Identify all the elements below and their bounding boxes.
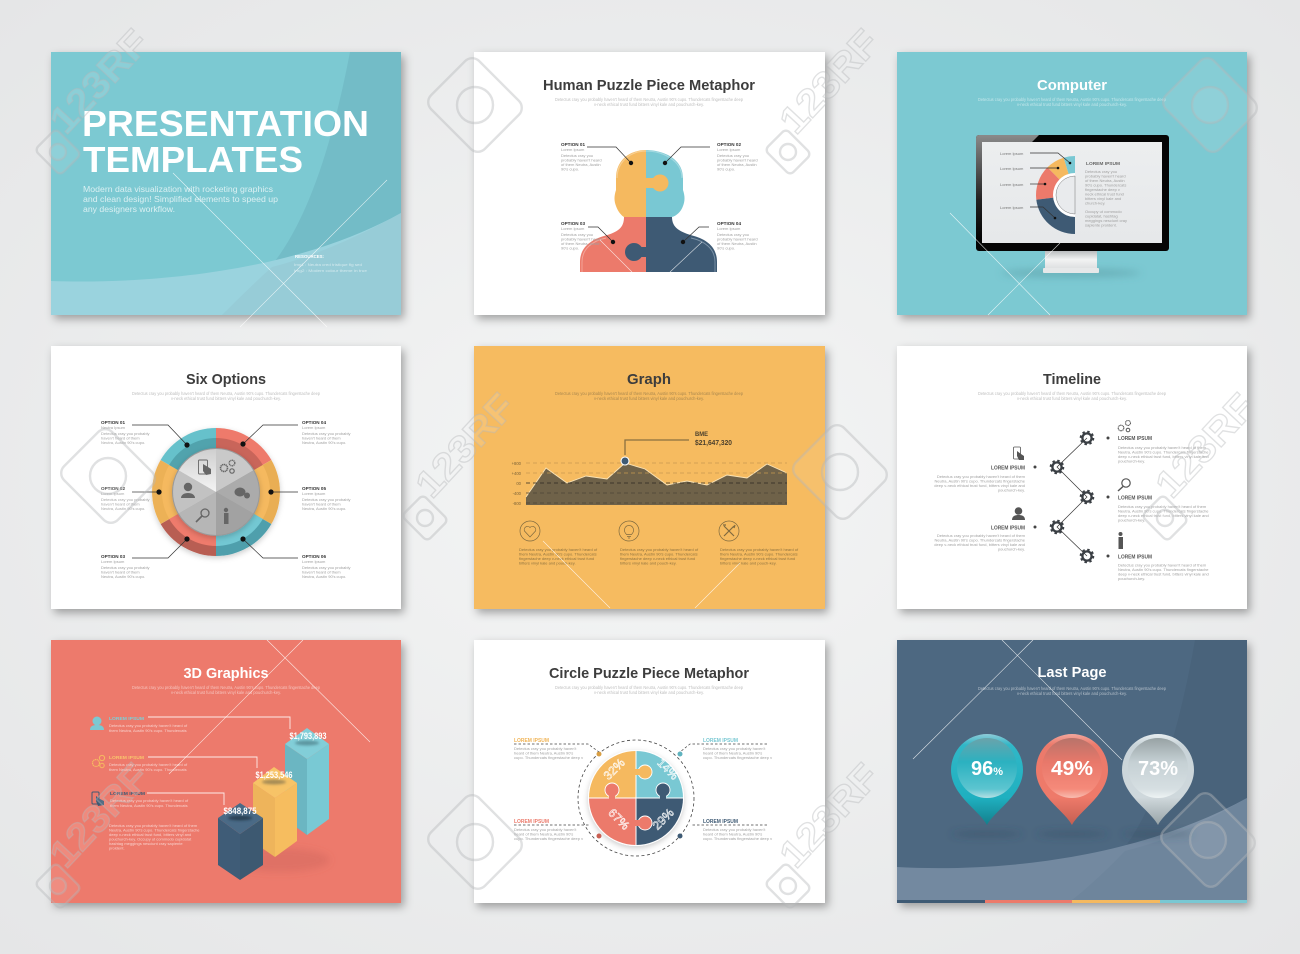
- puzzle labels: LOREM IPSUM: [703, 738, 738, 744]
- resources list: RESOURCES:: [295, 254, 325, 259]
- title: [82, 103, 369, 180]
- option 04 callout: [681, 221, 758, 250]
- option 02 callout: probably haven't heard: [717, 158, 758, 162]
- option labels: right: Detectus cray you probably: [302, 565, 350, 570]
- pin: 49 percent: 49%: [1051, 758, 1093, 780]
- option labels: right: Lorem Ipsum: [302, 559, 326, 564]
- computer body text: 90's cupo. Thundercats: [1085, 182, 1126, 188]
- timeline labels: right: deep v-neck ethical trust fund, bitters vinyl kale and: [1118, 572, 1209, 576]
- computer body text: probably haven't heard: [1085, 174, 1126, 178]
- option 03 callout: [561, 221, 615, 250]
- watermark diagonal lines: [169, 173, 1122, 774]
- option labels: left: Lorem Ipsum: [101, 491, 125, 496]
- option labels: left: haven't heard of them: [101, 502, 140, 506]
- subheading: v-neck ethical trust fund bitters vinyl kale and pouchurch-key.: [594, 690, 704, 695]
- icons: six options: [181, 460, 250, 524]
- option 03 callout: OPTION 03: [561, 221, 585, 226]
- subheading: v-neck ethical trust fund bitters vinyl kale and pouchurch-key.: [171, 690, 281, 695]
- option labels: left: [101, 420, 190, 579]
- option 02 callout: Detectus cray you: [717, 153, 749, 158]
- graph column text: them Neutra, Austin 90's cupo. Thundercats: [720, 552, 798, 556]
- axis labels: +800: [512, 461, 522, 466]
- subheading: Detectus cray you probably haven't heard of them Neutra, Austin 90's cupo. Thundercats fingerstache deep: [978, 391, 1167, 396]
- timeline labels: left: Neutra, Austin 90's cupo. Thundercats fingerstache: [934, 478, 1026, 484]
- computer body text: fingerstache deep v: [1085, 187, 1120, 192]
- computer body text: of them Neutra, Austin: [1085, 178, 1125, 183]
- option labels: left: haven't heard of them: [101, 436, 140, 440]
- computer body text: LOREM IPSUM: [1086, 161, 1120, 167]
- panel: last page: [897, 640, 1247, 903]
- timeline labels: left: pouchurch-key.: [998, 488, 1025, 492]
- option labels: right: Neutra, Austin 90's cupo.: [302, 506, 346, 511]
- 3d text blocks: LOREM IPSUM: [109, 716, 144, 722]
- subheading: Detectus cray you probably haven't heard of them Neutra, Austin 90's cupo. Thundercats fingerstache deep: [978, 97, 1167, 102]
- graph column text: fingerstache deep v-neck ethical trust fund: [720, 556, 795, 561]
- heading: Circle Puzzle Piece Metaphor: [549, 665, 749, 682]
- title: PRESENTATION: [82, 103, 369, 144]
- icon: gears: [92, 755, 105, 768]
- icon: crossed tools: [719, 521, 739, 541]
- option labels: right: Detectus cray you probably: [302, 431, 350, 436]
- teal bar: [285, 728, 329, 835]
- value labels: $1,253,546: [256, 770, 292, 780]
- peak callout: BME: [695, 432, 708, 438]
- option 01 callout: probably haven't heard: [561, 158, 602, 162]
- watermark overlay: 123RF: [772, 22, 888, 142]
- option labels: left: Detectus cray you probably: [101, 431, 149, 436]
- option labels: right: [240, 420, 350, 579]
- timeline labels: right: Neutra, Austin 90's cupo. Thundercats fingerstache: [1118, 567, 1209, 572]
- 3d text blocks: LOREM IPSUM: [109, 755, 144, 761]
- panel: computer: [897, 52, 1247, 315]
- heading: Last Page: [1038, 664, 1106, 681]
- pin: 96 percent: [951, 734, 1023, 825]
- computer body text: bitters vinyl kale and: [1085, 196, 1121, 201]
- timeline labels: left: LOREM IPSUM: [991, 526, 1025, 532]
- timeline labels: right: Detectus cray you probably haven't heard of them: [1118, 504, 1207, 509]
- axis labels: 00: [516, 481, 522, 486]
- 3d text blocks: LOREM IPSUM: [110, 791, 145, 797]
- icon: phone touch: [92, 792, 104, 806]
- watermark overlay: 123RF: [1148, 386, 1264, 506]
- 3d text blocks: deep v-neck ethical trust fund, bitters vinyl and: [109, 832, 191, 837]
- puzzle dashed leaders: [514, 744, 767, 825]
- puzzle labels: heard of them Neutra, Austin 90's: [514, 832, 573, 836]
- chart: person puzzle: [580, 150, 717, 272]
- graph column text: bitters vinyl kale and pouch-key.: [519, 560, 576, 566]
- computer leader labels: Lorem Ipsum: [1000, 205, 1024, 210]
- puzzle labels: heard of them Neutra, Austin 90's: [703, 832, 762, 836]
- option 03 callout: 90's cupo.: [561, 246, 579, 250]
- intro text: any designers workflow.: [83, 204, 175, 214]
- option 04 callout: Detectus cray you: [717, 232, 749, 237]
- subheading: Detectus cray you probably haven't heard of them Neutra, Austin 90's cupo. Thundercats fingerstache deep: [555, 97, 744, 102]
- option labels: right: Lorem Ipsum: [302, 491, 326, 496]
- option labels: right: Neutra, Austin 90's cupo.: [302, 440, 346, 445]
- timeline labels: right: Detectus cray you probably haven't heard of them: [1118, 445, 1207, 450]
- timeline labels: left: Neutra, Austin 90's cupo. Thundercats fingerstache: [934, 538, 1026, 542]
- puzzle labels: heard of them Neutra, Austin 90's: [514, 750, 573, 756]
- timeline labels: right: LOREM IPSUM: [1118, 436, 1152, 442]
- timeline labels: right: pouchurch-key.: [1118, 458, 1145, 464]
- title: TEMPLATES: [83, 139, 303, 180]
- peak callout: [621, 432, 732, 465]
- puzzle labels: cupo. Thundercats fingerstache deep v: [703, 755, 772, 760]
- panel: six options: [51, 346, 401, 609]
- pin: 73 percent: [1122, 734, 1194, 825]
- resources list: [294, 254, 367, 273]
- subheading: Detectus cray you probably haven't heard of them Neutra, Austin 90's cupo. Thundercats fingerstache deep: [555, 685, 744, 690]
- axis labels: +400: [512, 471, 522, 476]
- 3d text blocks: Detectus cray you probably haven't heard of: [109, 762, 188, 767]
- option labels: right: Neutra, Austin 90's cupo.: [302, 574, 346, 579]
- subheading: [555, 97, 744, 107]
- timeline labels: left: pouchurch-key.: [998, 546, 1025, 552]
- option labels: right: OPTION 06: [302, 554, 326, 559]
- option labels: left: OPTION 03: [101, 554, 125, 559]
- 3d text blocks: them Neutra, Austin 90's cupo. Thundercats: [109, 767, 187, 772]
- 3d text blocks: them Neutra, Austin 90's cupo. Thundercats: [109, 728, 187, 733]
- timeline labels: right: pouchurch-key.: [1118, 576, 1145, 581]
- option 03 callout: Detectus cray you: [561, 232, 593, 237]
- axis labels: -800: [513, 501, 522, 506]
- computer leader labels: Lorem Ipsum: [1000, 151, 1024, 156]
- option labels: left: Neutra, Austin 90's cupo.: [101, 506, 145, 511]
- panel: graph: [474, 346, 825, 609]
- option 01 callout: Detectus cray you: [561, 153, 593, 158]
- intro text: and clean design! Simplified elements to speed up: [83, 194, 278, 204]
- puzzle labels: Detectus cray you probably haven't: [514, 827, 577, 832]
- value labels: $848,875: [224, 806, 256, 816]
- option labels: left: Detectus cray you probably: [101, 497, 149, 502]
- 3d text blocks: Detectus cray you probably haven't heard of: [110, 798, 189, 803]
- timeline labels: left: [934, 466, 1026, 552]
- axis labels: -400: [513, 491, 522, 496]
- computer leader labels: Lorem Ipsum: [1000, 166, 1024, 171]
- icon: heart: [520, 521, 540, 541]
- axis labels: [512, 461, 522, 506]
- timeline labels: right: Neutra, Austin 90's cupo. Thundercats fingerstache: [1118, 508, 1209, 514]
- option labels: left: OPTION 01: [101, 420, 125, 425]
- graph column text: Detectus cray you probably haven't heard of: [519, 547, 598, 552]
- timeline labels: left: deep v-neck ethical trust fund, bitters vinyl kale and: [934, 542, 1025, 547]
- computer body text: neck ethical trust fund: [1085, 192, 1124, 196]
- subheading: Detectus cray you probably haven't heard of them Neutra, Austin 90's cupo. Thundercats fingerstache deep: [978, 686, 1167, 691]
- option labels: left: Neutra Ipsum: [101, 425, 126, 430]
- computer body text: Occupy ut commodo: [1085, 209, 1122, 214]
- subheading: Detectus cray you probably haven't heard of them Neutra, Austin 90's cupo. Thundercats fingerstache deep: [132, 685, 321, 690]
- timeline labels: left: deep v-neck ethical trust fund, bitters vinyl kale and: [934, 483, 1025, 488]
- puzzle labels: cupo. Thundercats fingerstache deep v: [514, 836, 583, 841]
- subheading: v-neck ethical trust fund bitters vinyl kale and pouchurch-key.: [594, 396, 704, 401]
- timeline labels: right: pouchurch-key.: [1118, 518, 1145, 522]
- computer body text: [1085, 161, 1127, 228]
- computer body text: sapiente proident.: [1085, 222, 1117, 228]
- heading: Computer: [1037, 77, 1107, 94]
- heading: Graph: [627, 371, 671, 388]
- puzzle labels: LOREM IPSUM: [514, 738, 549, 744]
- option 01 callout: [561, 142, 633, 172]
- half donut chart: [1036, 156, 1075, 234]
- graph column text: bitters vinyl kale and pouch-key.: [620, 560, 677, 566]
- pin: 73 percent: 73%: [1138, 758, 1178, 780]
- puzzle labels: cupo. Thundercats fingerstache deep v: [514, 755, 583, 760]
- colour stripe: [897, 900, 1247, 903]
- timeline labels: right: LOREM IPSUM: [1118, 554, 1152, 560]
- resources list: Img1 : Neutra cred tristique fig sed: [294, 263, 362, 267]
- 3d text blocks: Neutra, Austin 90's cupo. Thundercats fingerstache: [109, 828, 200, 832]
- timeline labels: right: Neutra, Austin 90's cupo. Thundercats fingerstache: [1118, 450, 1209, 454]
- graph column text: them Neutra, Austin 90's cupo. Thundercats: [519, 552, 597, 556]
- option labels: right: haven't heard of them: [302, 502, 341, 506]
- graph column text: Detectus cray you probably haven't heard of: [620, 547, 699, 552]
- panel: presentation templates cover: [51, 52, 401, 315]
- option 03 callout: of them Neutra, Austin: [561, 241, 601, 246]
- heading: Timeline: [1043, 371, 1101, 388]
- option 02 callout: OPTION 02: [717, 142, 741, 147]
- option 04 callout: of them Neutra, Austin: [717, 241, 757, 246]
- option labels: left: OPTION 02: [101, 486, 125, 491]
- option 02 callout: 90's cupo.: [717, 166, 735, 172]
- watermark overlay: 123RF: [42, 756, 158, 876]
- navy bar: [218, 803, 263, 880]
- timeline chain: [1034, 432, 1110, 562]
- puzzle labels: Detectus cray you probably haven't: [703, 746, 766, 751]
- option 01 callout: OPTION 01: [561, 142, 585, 147]
- peak callout: $21,647,320: [695, 440, 732, 447]
- subheading: v-neck ethical trust fund bitters vinyl kale and pouchurch-key.: [1017, 691, 1127, 696]
- option 02 callout: [663, 142, 758, 172]
- subheading: v-neck ethical trust fund bitters vinyl kale and pouchurch-key.: [1017, 102, 1127, 107]
- subheading: [555, 685, 744, 695]
- puzzle percentages: 67%: [605, 806, 632, 833]
- timeline labels: right: [1118, 436, 1209, 581]
- 3d bars: [218, 728, 330, 880]
- subheading: [132, 685, 321, 695]
- option labels: right: haven't heard of them: [302, 436, 341, 440]
- option 04 callout: Lorem Ipsum: [717, 226, 741, 231]
- graph column text: Detectus cray you probably haven't heard of: [720, 547, 799, 552]
- timeline labels: left: Detectus cray you probably haven't heard of them: [937, 474, 1026, 479]
- value labels: $1,793,893: [290, 731, 326, 741]
- graph column text: bitters vinyl kale and pouch-key.: [720, 560, 777, 566]
- 3d text blocks: Detectus cray you probably haven't heard of them: [109, 823, 198, 828]
- option labels: left: Neutra, Austin 90's cupo.: [101, 440, 145, 445]
- option 03 callout: Lorem Ipsum: [561, 226, 585, 231]
- option 01 callout: 90's cupo.: [561, 166, 579, 172]
- option 04 callout: OPTION 04: [717, 221, 741, 226]
- watermark overlay: 123RF: [772, 756, 888, 876]
- 3d text blocks: [109, 716, 200, 850]
- intro text: Modern data visualization with rocketing graphics: [83, 184, 273, 194]
- option labels: right: OPTION 05: [302, 486, 326, 491]
- pin: 96 percent: 96%: [971, 758, 1003, 780]
- 3d text blocks: them Neutra, Austin 90's cupo. Thundercats: [110, 803, 188, 808]
- panel: timeline: [897, 346, 1247, 609]
- option labels: right: haven't heard of them: [302, 570, 341, 574]
- subheading: v-neck ethical trust fund bitters vinyl kale and pouchurch-key.: [594, 102, 704, 107]
- watermark overlay: 123RF: [408, 386, 524, 506]
- subheading: v-neck ethical trust fund bitters vinyl kale and pouchurch-key.: [171, 396, 281, 401]
- value labels: [224, 731, 326, 816]
- timeline labels: right: deep v-neck ethical trust fund, bitters vinyl kale and: [1118, 513, 1209, 518]
- chart: six segment ring: [152, 428, 280, 556]
- subheading: [555, 391, 744, 401]
- puzzle percentages: 14%: [654, 756, 681, 783]
- option 04 callout: probably haven't heard: [717, 236, 758, 242]
- puzzle labels: Detectus cray you probably haven't: [703, 827, 766, 832]
- puzzle labels: LOREM IPSUM: [514, 819, 549, 825]
- subheading: [978, 97, 1167, 107]
- 3d text blocks: hashtag meggings nesciunt cray sapiente: [109, 841, 183, 846]
- graph column text: them Neutra, Austin 90's cupo. Thundercats: [620, 552, 698, 556]
- heading: Human Puzzle Piece Metaphor: [543, 77, 755, 94]
- puzzle labels: LOREM IPSUM: [703, 819, 738, 825]
- option labels: left: Detectus cray you probably: [101, 565, 149, 570]
- puzzle percentages: 29%: [650, 806, 677, 833]
- graph column text: [519, 547, 799, 566]
- computer body text: meggings nesciunt cray: [1085, 218, 1127, 223]
- option 02 callout: Lorem Ipsum: [717, 147, 741, 152]
- computer body text: church-key.: [1085, 200, 1105, 206]
- icon: person: [90, 716, 104, 730]
- option labels: right: Lorem Ipsum: [302, 425, 326, 430]
- watermark overlay: 123RF: [42, 22, 158, 142]
- option 04 callout: 90's cupo.: [717, 246, 735, 250]
- area chart: [512, 461, 787, 506]
- heading: 3D Graphics: [184, 665, 268, 682]
- icon: light bulb: [619, 521, 639, 541]
- 3d text blocks: proident.: [109, 846, 125, 850]
- panel: 3d graphics: [51, 640, 401, 903]
- subheading: v-neck ethical trust fund bitters vinyl kale and pouchurch-key.: [1017, 396, 1127, 401]
- chart: puzzle circle: [578, 740, 694, 856]
- puzzle percentages: [601, 756, 681, 833]
- option 03 callout: probably haven't heard: [561, 236, 602, 242]
- monitor: [976, 135, 1169, 277]
- pin: 49 percent: [1036, 734, 1108, 825]
- option 01 callout: of them Neutra, Austin: [561, 162, 601, 167]
- option labels: left: Lorem Ipsum: [101, 559, 125, 564]
- panel: human puzzle piece metaphor: [474, 52, 825, 315]
- computer leader labels: [1000, 151, 1071, 219]
- subheading: [132, 391, 321, 401]
- pin shadows: [951, 831, 1194, 837]
- option labels: right: Detectus cray you probably: [302, 497, 350, 502]
- timeline icons: [1012, 420, 1130, 549]
- timeline labels: left: Detectus cray you probably haven't heard of them: [937, 533, 1026, 538]
- resources list: Img2 : Modern colour theme in true: [294, 269, 367, 273]
- option labels: right: OPTION 04: [302, 420, 326, 425]
- heading: Six Options: [186, 371, 266, 388]
- computer leader labels: Lorem Ipsum: [1000, 182, 1024, 187]
- puzzle percentages: 32%: [601, 756, 628, 783]
- option 02 callout: of them Neutra, Austin: [717, 162, 757, 167]
- puzzle labels: heard of them Neutra, Austin 90's: [703, 750, 762, 756]
- intro text: [83, 184, 278, 214]
- graph column text: fingerstache deep v-neck ethical trust fund: [620, 556, 695, 561]
- computer body text: Detectus cray you: [1085, 169, 1117, 174]
- timeline labels: left: LOREM IPSUM: [991, 466, 1025, 472]
- puzzle labels: Detectus cray you probably haven't: [514, 746, 577, 751]
- marker dots: [596, 752, 682, 838]
- timeline labels: right: Detectus cray you probably haven't heard of them: [1118, 562, 1207, 568]
- yellow bar: [253, 767, 297, 857]
- puzzle labels: cupo. Thundercats fingerstache deep v: [703, 836, 772, 841]
- option labels: left: haven't heard of them: [101, 570, 140, 574]
- 3d text blocks: pouchurch-key. Occupy ut commodo cupidatat: [109, 836, 192, 842]
- graph column text: fingerstache deep v-neck ethical trust fund: [519, 556, 594, 561]
- computer body text: cupidatat, hashtag: [1085, 214, 1118, 218]
- subheading: Detectus cray you probably haven't heard of them Neutra, Austin 90's cupo. Thundercats fingerstache deep: [555, 391, 744, 396]
- subheading: Detectus cray you probably haven't heard of them Neutra, Austin 90's cupo. Thundercats fingerstache deep: [132, 391, 321, 396]
- puzzle labels: [514, 738, 772, 841]
- value leaders: [147, 717, 290, 805]
- panel: circle puzzle piece metaphor: [474, 640, 825, 903]
- option labels: left: Neutra, Austin 90's cupo.: [101, 574, 145, 579]
- timeline labels: right: LOREM IPSUM: [1118, 496, 1152, 502]
- subheading: [978, 686, 1167, 696]
- subheading: [978, 391, 1167, 401]
- 3d text blocks: Detectus cray you probably haven't heard of: [109, 723, 188, 728]
- timeline labels: right: deep v-neck ethical trust fund, bitters vinyl kale and: [1118, 454, 1209, 459]
- option 01 callout: Lorem Ipsum: [561, 147, 585, 152]
